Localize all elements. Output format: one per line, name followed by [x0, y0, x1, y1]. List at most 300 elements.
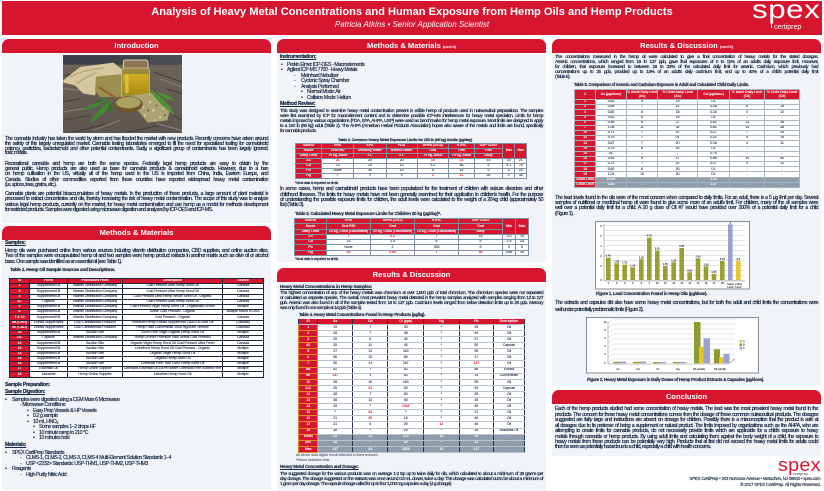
panel: results and discussion: [277, 268, 546, 491]
text: conclusion: attempting to create limits for cannabis products, do not necessarily provide limits which are applicable for a child's exposure to heavy: [555, 428, 818, 434]
table 4: heavy metal concentrations: 7: [369, 367, 371, 371]
text: lead levels: The lead levels found in the oils were of the most concern when compared to daily limits. For an adult, there is a 5 µg limit per day. Several: [555, 195, 818, 201]
table 4: heavy metal concentrations: 36: [333, 361, 337, 365]
text: introduction paragraph 1: toxic metals.: [5, 150, 27, 156]
list: instrumentation: Perkin Elmer ICP-OES - Macroelements: [287, 62, 364, 68]
bars: samples: [606, 238, 725, 280]
table 4: heavy metal concentrations: 7: [369, 325, 371, 329]
table 4: heavy metal concentrations: 49: [474, 386, 478, 390]
value labels: 4.70: [647, 234, 652, 238]
subheading: materials: Materials:: [5, 442, 26, 448]
table 4: heavy metal concentrations: 45: [474, 398, 478, 402]
table 4: heavy metal concentrations: 21: [474, 410, 478, 414]
text: exposure calculations: for children, that exposure increased to between 18 to 33% of the calculated daily limit for arsenic. Cadmium, which previously had: [555, 65, 818, 70]
table 4: heavy metal concentrations: 39: [474, 392, 478, 396]
footer contact text: © 2017 SPEX CertiPrep. All Rights Reserved.: [740, 482, 820, 487]
table 5: arsenic and cadmium exposure: (As): [674, 94, 681, 98]
table 4: heavy metal concentrations: 45: [404, 343, 408, 347]
heading: results and discussion: [277, 268, 546, 282]
table 4: heavy metal concentrations: Oil: [507, 416, 511, 420]
axis labels: 8: [604, 328, 606, 332]
table 4: heavy metal concentrations: 45: [474, 404, 478, 408]
axis labels: Child: [735, 282, 742, 286]
text: concentration and dosage: [280, 471, 544, 487]
subheading: concentration and dosage: Heavy Metal Concentration and Dosage:: [280, 464, 359, 469]
text: exposure calculations: concentrations up to 25 ppb, provided up to 14% of an adult's daily cadmium limit, and up to 40% of a child's potential daily limit: [555, 70, 818, 75]
list: instrumentation: Cyclonic Spray Chamber: [301, 78, 349, 84]
text: introduction paragraph 1: The cannabis industry has taken the world by storm and has flooded the market with new products. Recently concerns have arisen around: [5, 136, 268, 142]
table 4: heavy metal concentrations: 18: [333, 440, 337, 444]
table 4: heavy metal concentrations: *: [441, 440, 442, 444]
table 4: heavy metal concentrations: *: [441, 398, 442, 402]
table 5: arsenic and cadmium exposure: (Cd): [779, 94, 785, 98]
table 4: heavy metal concentrations: *: [441, 355, 442, 359]
axis labels: As: [616, 367, 620, 371]
heading: results and discussion continued: [552, 39, 821, 53]
list: instrumentation: Analysis Performed: [301, 84, 338, 90]
table 4: heavy metal concentrations: *: [441, 349, 442, 353]
table 4: heavy metal concentrations: 21: [333, 416, 337, 420]
caption: table 5: Table 5. Comparison of Arsenic and Cadmium Exposure in Adult and Calculated Child Daily Limits.: [574, 82, 749, 87]
text: limits for children: childhood illnesses. The limits for heavy metals have not been generally examined for their application to children's health. For the purpose: [280, 192, 543, 198]
value labels: 1.95: [671, 258, 677, 262]
text: introduction paragraph 2: [5, 160, 268, 188]
table 4: heavy metal concentrations: 8B: [306, 367, 310, 371]
footnote: table 2: *Most data is reported as limits: [295, 181, 338, 185]
value labels: 5: [730, 221, 732, 225]
list: instrumentation: •: [281, 62, 282, 68]
text: introduction paragraph 3: for restricted products. Samples were digested using microwave digestion and analyzed by ICP-OES and ICP-MS.: [5, 207, 212, 213]
axis labels: 12: [672, 281, 676, 285]
list: materials: SPEX CertiPrep Standards: [12, 450, 64, 456]
table 4: heavy metal concentrations: 46: [474, 416, 478, 420]
text: conclusion: heavy metals from these products can be potentially very high. Products that at first did not exceed the heavy metal limits for adults could: [555, 439, 818, 445]
panel: methods and materials: [2, 226, 271, 490]
table 4: heavy metal concentrations: 68: [404, 355, 408, 359]
table 2: exposure limits for adults: [295, 143, 527, 179]
list: materials: Reagents: [12, 466, 31, 472]
text: lead levels: samples of nutritional or medicinal hemp oil were found to give some more of an adult's limit. For children, many of the oil samples were: [555, 200, 818, 206]
panel: results and discussion continued: [552, 39, 821, 385]
heading: methods and materials: Methods & Materials: [100, 228, 173, 237]
text: introduction paragraph 1: the safety of this largely unregulated market. Cannabis testing laboratories emerged to fill the need for specialized testing for cannabinoid: [5, 141, 268, 147]
table 4: heavy metal concentrations: 18: [404, 416, 408, 420]
axis labels: 17: [713, 281, 716, 285]
table 4: heavy metal concentrations: 25: [333, 337, 337, 341]
subheading: sample preparation: Sample Preparation:: [5, 382, 50, 388]
table 4: heavy metal concentrations: 15: [368, 380, 372, 384]
footer contact text: [689, 476, 820, 488]
table 4: heavy metal concentrations: *: [441, 404, 442, 408]
table 4: heavy metal concentrations: -: [508, 434, 510, 438]
table 4: heavy metal concentrations: Extract: [504, 367, 514, 371]
axis labels: 1: [608, 281, 610, 285]
text: lead levels: (Figure 1).: [555, 211, 573, 217]
list: materials: CLMS-1, CLMS-2, CLMS-3, CLMS-4 Multi-Element Solution Standards 1–4: [26, 455, 171, 461]
table 4: heavy metal concentrations: 5: [307, 349, 309, 353]
list: sample digestion steps: 10 minute ramp to 210 °C: [39, 430, 88, 436]
table 4: heavy metal concentrations: 49: [474, 325, 478, 329]
heading: results and discussion continued: Results & Discussion (cont'd): [640, 41, 733, 50]
table 4: heavy metal concentrations: 48: [404, 398, 408, 402]
text: samples description: Two of the samples were encapsulated hemp oil and two samples were hemp product extracts in another matrix such as olive oil or alcohol: [5, 253, 268, 259]
axis labels: 3: [600, 254, 602, 258]
table 4: heavy metal concentrations: 17: [306, 422, 310, 426]
axis labels: Cd: [636, 367, 640, 371]
axis labels: [600, 224, 742, 289]
table 5: arsenic and cadmium exposure: Cd (µg/dose): [703, 92, 724, 96]
axis labels: 13: [680, 281, 684, 285]
table 4: heavy metal concentrations: 11: [368, 343, 372, 347]
axis labels: 15: [697, 281, 700, 285]
value labels: [606, 221, 741, 274]
text: extracts and capsules: well under potentially problematic limits (Figure 2).: [555, 307, 643, 313]
text: limits for children: In some cases, hemp and cannabinoid products have been popularized for the treatment of children with seizure disorders and other: [280, 186, 543, 192]
text: method review: [280, 108, 544, 134]
text: heavy metal concentrations: [280, 290, 544, 311]
table 3: exposure limits for children: [294, 218, 529, 256]
axis labels: 18: [721, 281, 724, 285]
panel: methods and materials continued: [277, 39, 546, 262]
table 4: heavy metal concentrations: *: [370, 404, 371, 408]
gridlines: [604, 226, 745, 280]
table 4: heavy metal concentrations: 18: [306, 428, 310, 432]
list: sample digestion steps: •: [27, 419, 28, 425]
list: sample digestion steps: - Microwave Conditions:: [20, 402, 66, 408]
table 4: heavy metal concentrations: *: [405, 410, 406, 414]
axis labels: 6: [604, 336, 606, 340]
list: sample digestion steps: Some samples 1–2 drops HF: [39, 424, 96, 430]
subheading: samples: Samples:: [5, 240, 26, 246]
table 4: heavy metal concentrations: 30: [404, 440, 408, 444]
table 4: heavy metal concentrations: 36: [333, 355, 337, 359]
text: heavy metal concentrations: was only found in one sample at 14 ppb (Table 4).: [280, 306, 361, 311]
table 4: heavy metal concentrations: 29: [333, 404, 337, 408]
table 4: heavy metal concentrations: 1933: [402, 404, 409, 408]
table 4: heavy metal concentrations: 7: [307, 361, 309, 365]
table 4: heavy metal concentrations: 28: [333, 331, 337, 335]
heading: methods and materials continued: [277, 39, 546, 53]
footnote: table 3: *Most data is reported as limits: [295, 256, 338, 260]
axis labels: 10: [656, 281, 659, 285]
table 5: arsenic and cadmium exposure: % Adult Daily Limit: [732, 90, 762, 94]
value labels: 0.85: [687, 268, 693, 272]
caption: table 3: Table 3. Calculated Heavy Metal Exposure Limits for Children 20 kg (µg/day)*.: [295, 211, 441, 216]
list: sample digestion steps: •: [5, 397, 6, 403]
table 4: heavy metal concentrations: 163: [403, 349, 409, 353]
table 5: arsenic and cadmium exposure: #: [584, 92, 586, 96]
legend: B: [742, 344, 744, 347]
table 4: heavy metal concentrations: *: [441, 386, 442, 390]
chart: heavy metal exposure in daily doses: [586, 317, 759, 374]
heading: conclusion: Conclusion: [666, 392, 707, 401]
table 4: heavy metal concentrations: 127: [473, 447, 479, 451]
list: materials: High Purity Nitric Acid: [26, 472, 66, 478]
table 5: arsenic and cadmium exposure: (As): [639, 94, 645, 98]
value labels: 1.55: [663, 262, 668, 266]
table 5: arsenic and cadmium exposure: (Cd): [744, 94, 750, 98]
list: sample digestion steps: •: [27, 413, 28, 419]
list: sample digestion steps: •: [27, 408, 28, 414]
table 4: heavy metal concentrations: Oil: [507, 355, 511, 359]
table 5: arsenic and cadmium exposure: % Child Daily Limit: [662, 90, 693, 94]
text: limits for children: of understanding the possible exposure limits for children, the adult levels were calculated to the weight of a 20-kg child (approximately 50: [280, 197, 543, 203]
table 4: heavy metal concentrations: 39: [474, 380, 478, 384]
table 4: heavy metal concentrations: Oil: [507, 392, 511, 396]
value labels: 2.45: [606, 254, 611, 258]
text: method review: metals imposed by various organizations (FDA, EPA, AHPA, USP) were used as benchmarks for hemp metal exposure. Most limits are designed to apply: [280, 119, 543, 124]
image: hemp oil jar with seeds: [63, 55, 182, 133]
caption: table 2: Table 2. Common Heavy Metal Exposure Limits for 150 lb (68 kg) Adults (µg/day): [338, 137, 472, 142]
table 4: heavy metal concentrations: Industrial Oil: [500, 428, 518, 432]
table 4: heavy metal concentrations: 49: [474, 331, 478, 335]
list: instrumentation: -: [294, 84, 295, 90]
poster title: Analysis of Heavy Metal Concentrations and Human Exposure from Hemp Oils and Hemp Products: [151, 6, 673, 18]
list: instrumentation: •: [301, 89, 302, 95]
list: sample digestion steps: Easy Prep Vessels & HP Vessels: [33, 408, 96, 414]
table 4: heavy metal concentrations: 45: [404, 337, 408, 341]
text: heavy metal concentrations: or calculated as separate species. The overall, most prevalent heavy metal detected in the hemp samples analyzed with samples ranging from 13 to 127: [280, 296, 543, 301]
table 4: heavy metal concentrations: 14: [439, 447, 443, 451]
list: instrumentation: -: [294, 73, 295, 79]
table 4: heavy metal concentrations: *: [370, 440, 371, 444]
table 4: heavy metal concentrations: 47: [474, 355, 478, 359]
table 4: heavy metal concentrations: Oil: [507, 410, 511, 414]
text: conclusion: metals through cannabis or hemp products. By using adult limits and calculating them against the body weight of a child, the exposure to: [555, 434, 818, 440]
bars: small groups: [612, 362, 686, 363]
table 4: heavy metal concentrations: *: [441, 331, 442, 335]
axis labels: 7: [649, 281, 651, 285]
table 4: heavy metal concentrations: Oil: [507, 337, 511, 341]
table 4: heavy metal concentrations: 1933: [402, 447, 409, 451]
value labels: 3.55: [679, 244, 685, 248]
text: limits for children: [280, 186, 544, 208]
gridlines: [608, 319, 734, 363]
table 4: heavy metal concentrations: Max: [305, 447, 312, 451]
table 4: heavy metal concentrations: *: [441, 410, 442, 414]
text: extracts and capsules: [554, 300, 818, 313]
table 4: heavy metal concentrations: 33: [333, 434, 337, 438]
table 4: heavy metal concentrations: Oil: [507, 404, 511, 408]
table 4: heavy metal concentrations: 27: [474, 337, 478, 341]
list: instrumentation: Normal Mode: Air: [307, 89, 340, 95]
axis labels: Limit: [727, 285, 734, 289]
list: sample digestion steps: 10 minutes hold: [39, 435, 69, 441]
table 4: heavy metal concentrations: 83: [404, 367, 408, 371]
list: instrumentation: -: [294, 78, 295, 84]
legend: A: [742, 340, 744, 343]
table 4: heavy metal concentrations: 21: [333, 422, 337, 426]
table 4: heavy metal concentrations: Min: [305, 440, 311, 444]
table 4: heavy metal concentrations: 11C: [305, 386, 311, 390]
table 4: heavy metal concentrations: 35: [474, 349, 478, 353]
value labels: 1.70: [622, 261, 628, 265]
list: materials: -: [20, 472, 21, 478]
table 4: heavy metal concentrations: *: [441, 373, 442, 377]
list: sample digestion steps: •: [33, 430, 34, 436]
text: extracts and capsules: The extracts and capsules did also have some heavy metal concentrations, but for both the adult and child limits the concentrations were: [555, 300, 818, 306]
table 4: heavy metal concentrations: 25: [333, 343, 337, 347]
table 4: heavy metal concentrations: Oil: [507, 349, 511, 353]
table 4: heavy metal concentrations: 127: [473, 361, 479, 365]
table 4: heavy metal concentrations: 10: [306, 380, 310, 384]
table 4: heavy metal concentrations: 14: [368, 361, 372, 365]
text: samples description: [5, 248, 268, 265]
footer logo: spex certiprep: spex: [778, 455, 821, 475]
table 4: heavy metal concentrations: 15: [368, 355, 372, 359]
caption: table 4: Table 4. Heavy Metal Concentrations Found in Hemp Products (µg/kg).: [299, 312, 425, 317]
text: heavy metal concentrations: ppb. Arsenic was also found in all of the samples tested from 18 to 137 ppb. Cadmium levels ranged from below detection limits up to 25 ppb. Mercury: [280, 301, 543, 306]
axis labels: Limit: [735, 285, 742, 289]
list: instrumentation: Agilent ICP-MS 7700 - Heavy Metals: [287, 67, 357, 73]
table 4: heavy metal concentrations: 15: [306, 410, 310, 414]
table 4: heavy metal concentrations: 13: [306, 398, 310, 402]
table 4: heavy metal concentrations: 170: [403, 434, 409, 438]
text: introduction paragraph 2: general public. Hemp products are also used as base for cannabis products & cannabinoid extracts. However, due to a ban: [5, 166, 268, 172]
table 4: heavy metal concentrations: 33: [404, 325, 408, 329]
text: heavy metal concentrations: The highest concentration of any of the heavy metals was chromium at over 1,800 ppb of total chromium. The chromium species were not separated: [280, 291, 543, 296]
text: conclusion: all dosages due to its pretense of being a supplement or natural product. The limits imposed by organizations such as the AHPA, who are: [555, 423, 818, 429]
caption: figure 2: Figure 2. Heavy Metal Exposure in Daily Doses of Hemp Product Extracts & Capsules (µg/dose).: [587, 377, 764, 382]
table 4: heavy metal concentrations: 1: [307, 325, 309, 329]
text: conclusion: Each of the hemp products studied had some concentration of heavy metals. The lead was the most prevalent heavy metal found in the: [555, 406, 818, 412]
footnote: table 4: [296, 453, 378, 462]
table 4: heavy metal concentrations: *: [441, 343, 442, 347]
table 4: heavy metal concentrations: *: [370, 428, 371, 432]
text: introduction paragraph 1: potency, pesticides, bacteria/mold and other potential contaminants. Sadly, a significant group of contaminants has been largely ignored:: [5, 146, 268, 152]
table 4: heavy metal concentrations: *: [441, 367, 442, 371]
axis labels: 16: [705, 281, 708, 285]
list: sample digestion steps: 10 mL HNO₃: [33, 419, 58, 425]
table 4: heavy metal concentrations: 11: [368, 434, 372, 438]
table 4: heavy metal concentrations: Oil: [507, 380, 511, 384]
table 4: heavy metal concentrations: 86: [474, 367, 478, 371]
table 4: heavy metal concentrations: *: [441, 428, 442, 432]
caption: figure 1: Figure 1. Lead Concentration Found in Hemp Oils (µg/dose).: [596, 291, 707, 296]
legend: [739, 340, 744, 350]
list: sample digestion steps: 0.2 g sample: [33, 413, 58, 419]
value labels: 2.30: [639, 255, 644, 259]
table 4: heavy metal concentrations: 163: [403, 380, 409, 384]
list: sample digestion steps: Samples were digested using a CEM Mars 6 Microwave: [12, 397, 120, 403]
table 4: heavy metal concentrations: *: [441, 337, 442, 341]
text: introduction paragraph 3: [4, 190, 269, 213]
table 4: heavy metal concentrations: 29: [404, 422, 408, 426]
text: samples description: base. One sample was identified as an essential oil (see Table 1).: [5, 259, 122, 265]
table 4: heavy metal concentrations: 16: [306, 416, 310, 420]
text: samples description: Hemp oils were purchased online from various sources including vitamin distribution companies, CBD suppliers, and online auction sites.: [5, 248, 268, 254]
table 4: heavy metal concentrations: 14: [439, 434, 443, 438]
list: instrumentation: Collision Mode: Helium: [307, 95, 351, 101]
table 4: heavy metal concentrations: 7: [369, 331, 371, 335]
footer contact text: SPEX CertiPrep • 203 Norcross Avenue • Metuchen, NJ 08840 • spex.com: [689, 476, 820, 481]
axis labels: 5: [632, 281, 634, 285]
table 4: heavy metal concentrations: 167: [403, 361, 409, 365]
text: introduction paragraph 3: various legal hemp products, currently on the market, for heavy metal contamination and use hemp as a model for methods development: [5, 202, 268, 208]
axis labels: Hg: [676, 367, 680, 371]
table 4: heavy metal concentrations: 19: [333, 325, 337, 329]
table 4: heavy metal concentrations: 13: [368, 349, 372, 353]
table 2: exposure limits for adults: Max: [517, 148, 524, 152]
axis labels: 14: [688, 281, 692, 285]
panel: introduction: [2, 39, 271, 223]
text: method review: This study was designed to examine heavy metal contamination present in edible hemp oil products used in nutraceutical preparations. The samples: [280, 108, 543, 114]
list: materials: [5, 450, 172, 478]
table 4: heavy metal concentrations: 137: [332, 373, 338, 377]
table 4: heavy metal concentrations: 24: [368, 410, 372, 414]
value labels: 1.50: [703, 262, 709, 266]
table 4: heavy metal concentrations: *: [441, 416, 442, 420]
chart: lead concentration in hemp oils: [595, 221, 750, 290]
table 4: heavy metal concentrations: 89: [404, 386, 408, 390]
axis labels: 11: [664, 281, 667, 285]
table 4: heavy metal concentrations: 83: [404, 392, 408, 396]
list: instrumentation: •: [281, 67, 282, 73]
table 4: heavy metal concentrations: 7: [369, 392, 371, 396]
table 4: heavy metal concentrations: 29: [404, 428, 408, 432]
table 2: exposure limits for adults: Min: [506, 148, 512, 152]
axis labels: [603, 320, 726, 371]
list: sample digestion steps: •: [33, 435, 34, 441]
bar: adult limit: [728, 224, 733, 280]
text: exposure calculations: (Table 5).: [555, 75, 570, 80]
table 4: heavy metal concentrations: Mean: [304, 434, 313, 438]
table 4: heavy metal concentrations: 14: [439, 422, 443, 426]
table 3: exposure limits for children: Min: [506, 224, 512, 228]
list: materials: -: [20, 461, 21, 467]
table 4: heavy metal concentrations: 45: [474, 422, 478, 426]
table 4: heavy metal concentrations: Capsule: [503, 386, 515, 390]
list: instrumentation: [281, 62, 365, 101]
table 4: heavy metal concentrations: Capsule: [503, 343, 515, 347]
heading: conclusion: [552, 390, 821, 404]
axis labels: Pb (adult): [693, 367, 705, 371]
text: introduction paragraph 3: processed to extract concentrates and oils, thereby increasing the risk of heavy metal contamination. The scope of this study was to analyze: [5, 196, 268, 202]
value labels: 0.65: [711, 270, 717, 274]
table 4: heavy metal concentrations: *: [441, 361, 442, 365]
table 4: heavy metal concentrations: -: [508, 440, 510, 444]
table 4: heavy metal concentrations: 28: [333, 380, 337, 384]
text: concentration and dosage: day dosage. The dosage suggested on the extracts was once around 0.5 mL doses, twice a day. This dosage was calculated out to be about a minimum of: [280, 477, 543, 482]
axis labels: 10: [603, 320, 606, 324]
legend: C: [742, 347, 744, 350]
axis labels: Cr: [656, 367, 659, 371]
table 4: heavy metal concentrations: 83: [404, 373, 408, 377]
axis labels: 5: [600, 234, 602, 238]
text: exposure calculations: Arsenic concentrations, which ranged from 18 to 137 ppb, gave final exposures of 0 to 11% of an adult's daily exposure limit. However,: [555, 60, 818, 65]
list: materials: •: [5, 450, 6, 456]
table 4: heavy metal concentrations: *: [441, 325, 442, 329]
table 4: heavy metal concentrations: 3: [307, 337, 309, 341]
list: materials: USP <2232> Standards: USP-THM1, USP-THM2, USP-THM3: [26, 461, 148, 467]
text: method review: for cannabis products.: [280, 129, 316, 134]
table 4: heavy metal concentrations: *: [441, 380, 442, 384]
table 5: arsenic and cadmium exposure: % Child Daily Limit: [767, 90, 797, 94]
text: method review: were first examined by ICP for macroelement content and to determine possible ICP-MS interferences for heavy metal speciation. Limits for hemp: [280, 114, 543, 119]
text: concentration and dosage: The suggested dosage for the various products was on average 1-2 tsp up to twice daily for oils, which calculated to about a minimum of 28 grams per: [280, 472, 543, 476]
header banner: [2, 1, 822, 35]
footnote: table 4: All whole data digital result detected in fixed reduced: [296, 453, 378, 457]
table 4: heavy metal concentrations: Oil: [507, 331, 511, 335]
table 4: heavy metal concentrations: *: [441, 392, 442, 396]
table 4: heavy metal concentrations: 39: [333, 428, 337, 432]
bars: chromium group: [714, 349, 729, 363]
text: limits for children: lbs) (Table 3).: [280, 202, 304, 208]
value labels: 1.85: [614, 259, 620, 263]
table 4: heavy metal concentrations: 50: [474, 343, 478, 347]
table 3: exposure limits for children: Max: [519, 224, 525, 228]
heading: methods and materials continued: Methods & Materials (cont'd): [367, 41, 456, 50]
